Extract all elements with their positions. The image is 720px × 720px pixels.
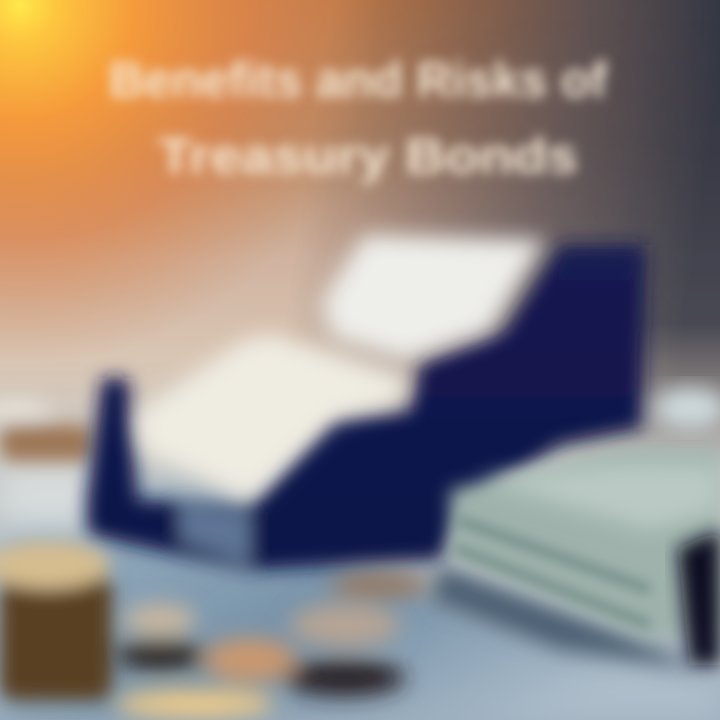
bill top highlight <box>480 462 720 530</box>
table surface <box>0 465 720 720</box>
bill stripes <box>455 520 650 625</box>
dark object at edge <box>678 530 720 665</box>
scattered coins <box>115 573 430 719</box>
background coins, left <box>0 399 92 461</box>
coin stacks, foreground <box>0 541 430 719</box>
bills body <box>450 450 720 640</box>
title: Treasury Bonds <box>158 128 578 184</box>
far bill highlight <box>654 388 720 428</box>
stack of bills, right <box>430 388 720 670</box>
large coin stack <box>0 541 112 700</box>
rising navy stair chart <box>86 245 645 570</box>
title <box>109 52 607 184</box>
title: Benefits and Risks of <box>109 52 607 108</box>
shadow under bills <box>430 565 700 670</box>
white paper steps <box>135 235 545 500</box>
